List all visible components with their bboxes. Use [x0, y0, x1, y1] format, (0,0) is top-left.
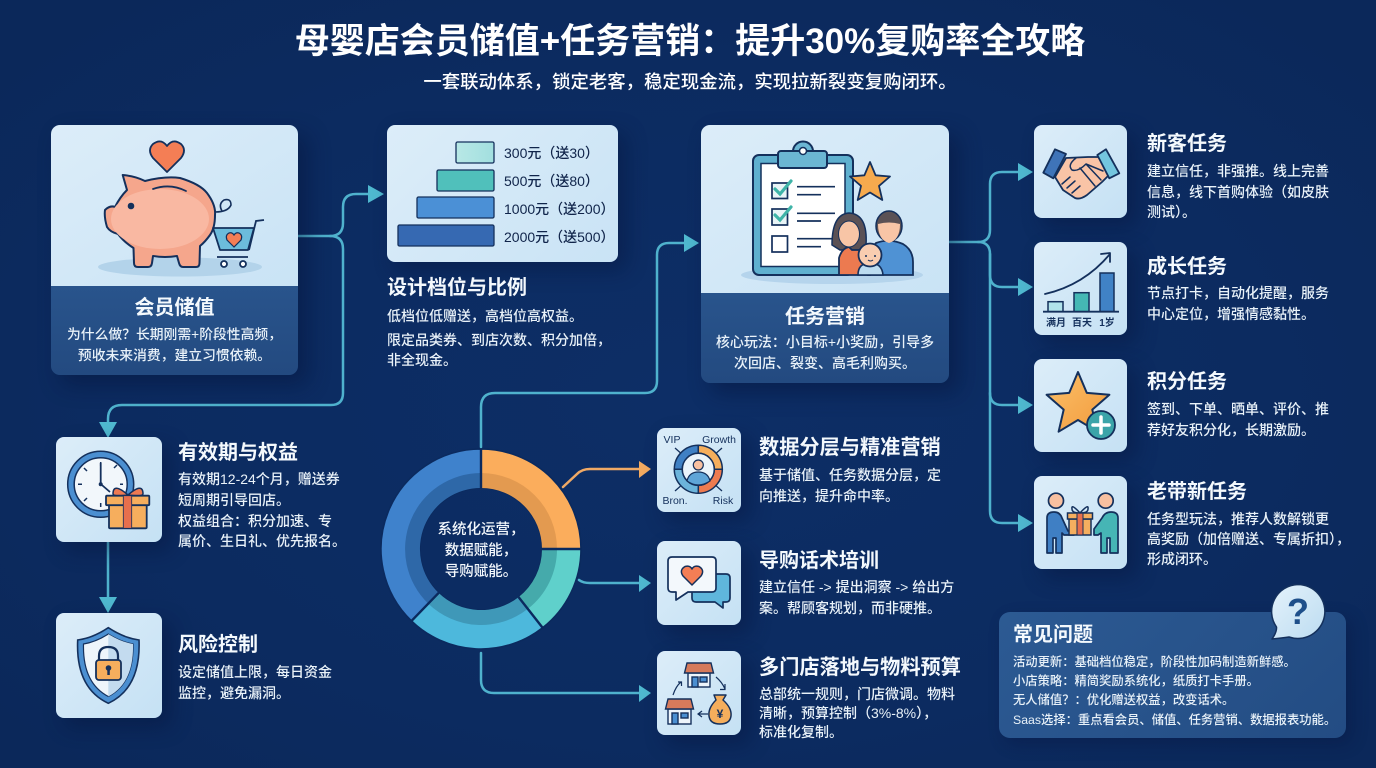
description: 签到、下单、晒单、评价、推	[1147, 401, 1329, 417]
description: 短周期引导回店。	[178, 492, 290, 508]
section: tier design text	[387, 276, 611, 368]
description	[1147, 163, 1329, 220]
description: 荐好友积分化，长期激励。	[1147, 422, 1315, 438]
card: validity and benefits	[56, 434, 346, 563]
heading: 设计档位与比例	[387, 277, 527, 299]
description	[178, 664, 332, 700]
description: 预收未来消费，建立习惯依赖。	[78, 348, 271, 363]
card: referral task	[1031, 476, 1350, 580]
arrow: operations to task marketing	[481, 234, 699, 447]
subtitle: 一套联动体系，锁定老客，稳定现金流，实现拉新裂变复购闭环。	[423, 71, 957, 92]
heading: 任务营销	[785, 306, 865, 328]
tier bars	[397, 141, 495, 247]
icon: question mark speech bubble: ?	[1287, 591, 1309, 632]
panel: task marketing	[701, 125, 949, 383]
icon: customer segmentation ring	[657, 428, 741, 512]
icon: clock with gift	[56, 437, 162, 542]
illustration: piggy bank with heart and cart	[51, 125, 298, 286]
description	[178, 471, 346, 549]
baby	[858, 263, 883, 275]
description: 属价、生日礼、优先报名。	[178, 533, 346, 549]
heading: 数据分层与精准营销	[759, 437, 941, 459]
description	[759, 686, 955, 740]
title: 母婴店会员储值+任务营销：提升30%复购率全攻略	[295, 22, 1085, 61]
heading: 积分任务	[1147, 371, 1227, 393]
description: 案。帮顾客规划，而非硬推。	[759, 600, 941, 616]
description: 有效期12-24个月，赠送券	[178, 471, 340, 487]
description: 设定储值上限，每日资金	[178, 664, 332, 680]
icon: customer segmentation ring: Bron.	[662, 495, 688, 507]
heading: 风险控制	[178, 634, 258, 656]
tier labels: 1000元（送200）	[504, 201, 615, 217]
caption block	[701, 293, 949, 383]
icon: growth bar chart: 满月	[1046, 316, 1066, 329]
icon: people exchanging a gift	[1034, 476, 1127, 569]
icon: handshake	[1034, 125, 1127, 218]
center text: 数据赋能，	[445, 543, 517, 559]
heading: 成长任务	[1147, 256, 1227, 278]
heading: 常见问题	[1013, 624, 1093, 646]
icon: growth bar chart: 百天	[1072, 317, 1092, 329]
donut segments	[382, 448, 580, 648]
icon: stores and money bag	[657, 651, 741, 735]
description: 限定品类券、到店次数、积分加倍，	[387, 332, 611, 348]
description	[759, 579, 954, 616]
icon: growth bar chart: 1岁	[1099, 316, 1115, 329]
description: 非全现金。	[387, 352, 457, 368]
card: sales script training	[657, 541, 954, 636]
description: 标准化复制。	[759, 724, 843, 740]
description	[716, 334, 934, 370]
card: points task	[1031, 359, 1329, 462]
arrow: savings to tier design	[298, 185, 384, 236]
description: 任务型玩法，推荐人数解锁更	[1147, 511, 1329, 527]
icon: customer segmentation ring: Risk	[713, 495, 734, 507]
card: growth task	[1031, 242, 1329, 346]
heading: 有效期与权益	[178, 442, 298, 464]
heading: 新客任务	[1147, 133, 1227, 155]
arrow: donut to sales training	[579, 575, 651, 592]
FAQ list: 活动更新：基础档位稳定，阶段性加码制造新鲜感。	[1013, 655, 1296, 669]
arrow: validity to risk control	[99, 542, 117, 613]
description: 建立信任 -> 提出洞察 -> 给出方	[759, 579, 954, 595]
donut chart: systematic operations	[382, 448, 580, 648]
description	[759, 467, 941, 504]
description: 权益组合：积分加速、专	[178, 513, 332, 529]
heading: 老带新任务	[1147, 481, 1247, 503]
icon: star with plus	[1034, 359, 1127, 452]
description: 基于储值、任务数据分层，定	[759, 467, 941, 483]
card: risk control	[56, 610, 332, 728]
description	[1147, 285, 1329, 322]
FAQ list: Saas选择：重点看会员、储值、任务营销、数据报表功能。	[1013, 713, 1336, 727]
description	[67, 327, 282, 363]
center text: 系统化运营，	[438, 522, 524, 538]
panel: tier design chart	[387, 125, 618, 262]
description: 建立信任，非强推。线上完善	[1147, 163, 1329, 179]
tier labels	[504, 145, 615, 245]
icon: shield with padlock	[56, 613, 162, 718]
arrow: donut to data segmentation	[563, 461, 651, 487]
description	[1147, 511, 1350, 567]
description	[1147, 401, 1329, 438]
description: 向推送，提升命中率。	[759, 488, 899, 504]
tier labels: 2000元（送500）	[504, 229, 615, 245]
panel: FAQ	[999, 612, 1346, 738]
caption block	[51, 286, 298, 375]
card: data segmentation	[657, 428, 941, 524]
description: 监控，避免漏洞。	[178, 684, 290, 700]
description: 形成闭环。	[1147, 551, 1217, 567]
description: 测试）。	[1147, 204, 1196, 220]
icon: chat bubbles with heart	[657, 541, 741, 625]
heading: 多门店落地与物料预算	[759, 657, 961, 679]
description	[387, 308, 611, 368]
icon: stores and money bag: ¥	[717, 707, 724, 721]
description: 低档位低赠送，高档位高权益。	[387, 308, 583, 324]
description: 总部统一规则，门店微调。物料	[759, 686, 955, 702]
woman	[832, 213, 866, 250]
arrows: task marketing to four tasks	[949, 163, 1033, 532]
description: 信息，线下首购体验（如皮肤	[1147, 184, 1329, 200]
description: 中心定位，增强情感黏性。	[1147, 306, 1315, 322]
description: 高奖励（加倍赠送、专属折扣），	[1147, 531, 1350, 547]
FAQ list: 无人储值？：优化赠送权益，改变话术。	[1013, 693, 1234, 707]
center text: 导购赋能。	[445, 564, 517, 580]
arrow: savings to validity	[99, 236, 343, 438]
FAQ list	[1013, 655, 1336, 727]
description: 节点打卡，自动化提醒，服务	[1147, 285, 1329, 301]
man	[868, 241, 913, 275]
illustration: clipboard, star and family	[701, 125, 949, 293]
heading: 会员储值	[134, 297, 214, 319]
card: new customer task	[1031, 125, 1329, 228]
center text	[438, 521, 524, 580]
description: 为什么做？长期刚需+阶段性高频，	[67, 327, 282, 342]
panel: member savings	[51, 125, 298, 375]
card: multi-store rollout	[657, 651, 961, 746]
description: 清晰，预算控制（3%-8%），	[759, 705, 937, 721]
arrow: donut to multi-store	[481, 653, 651, 702]
tier labels: 300元（送30）	[504, 145, 599, 161]
icon: customer segmentation ring: Growth	[702, 434, 736, 446]
description: 次回店、裂变、高毛利购买。	[734, 354, 916, 370]
tier labels: 500元（送80）	[504, 173, 599, 189]
FAQ list: 小店策略：精简奖励系统化，纸质打卡手册。	[1013, 674, 1259, 688]
description: 核心玩法：小目标+小奖励，引导多	[716, 334, 934, 350]
heading: 导购话术培训	[759, 550, 879, 572]
icon: customer segmentation ring: VIP	[664, 434, 680, 446]
icon: growth bar chart	[1034, 242, 1127, 335]
icon: question mark speech bubble	[1270, 584, 1326, 640]
